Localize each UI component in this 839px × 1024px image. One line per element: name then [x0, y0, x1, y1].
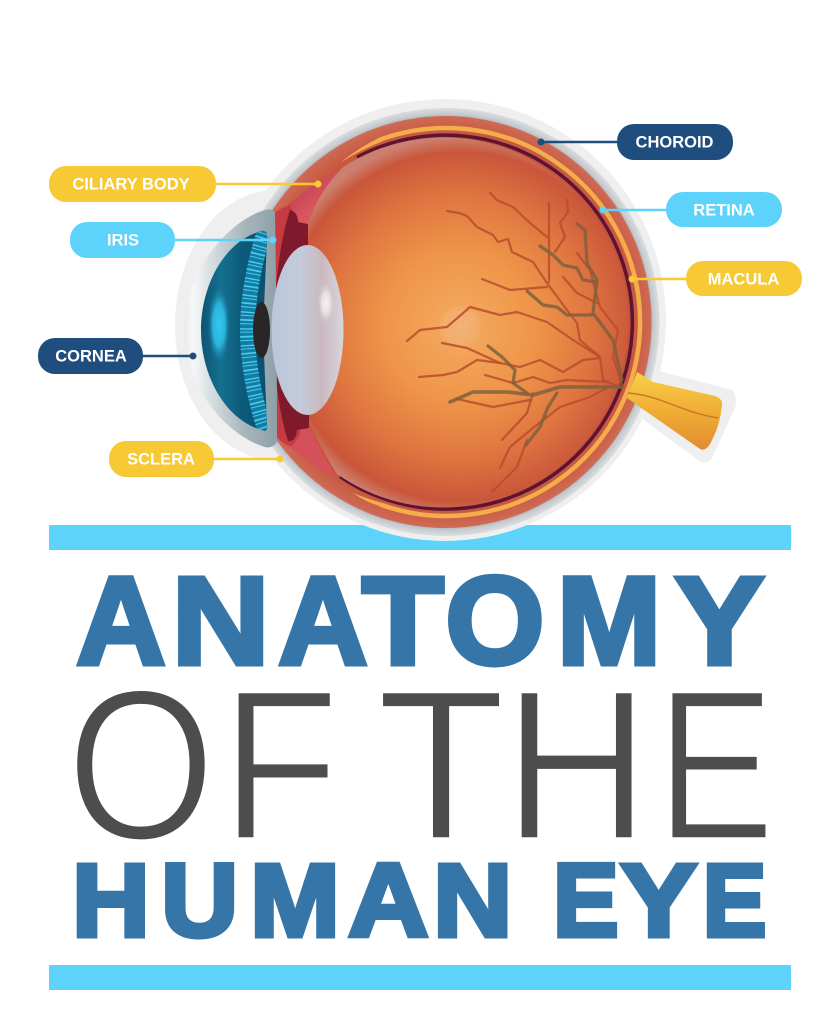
label: sclera [109, 441, 284, 477]
title line: HUMAN EYE: H [72, 844, 150, 959]
retina dark ring [340, 135, 632, 509]
label: ciliary body [49, 166, 322, 202]
bottom cyan bar [49, 965, 791, 990]
choroid red layer [240, 116, 652, 528]
title line: HUMAN EYE: Y [621, 844, 697, 959]
title line: ANATOMY: N [172, 551, 270, 691]
label: macula: MACULA [708, 270, 779, 288]
title line: HUMAN EYE [72, 842, 766, 959]
iris tissue [262, 205, 309, 446]
ciliary body muscle [280, 167, 343, 478]
eye illustration [175, 99, 736, 541]
title line: HUMAN EYE: U [161, 843, 238, 959]
title line: OF THE: E [656, 645, 774, 885]
pupil [253, 302, 270, 358]
title line: OF THE: F [221, 646, 339, 885]
label: iris [70, 222, 276, 258]
label: ciliary body: CILIARY BODY [72, 176, 190, 194]
yellow choroid ring [340, 128, 640, 516]
label: choroid [538, 124, 733, 160]
title line: ANATOMY: M [557, 552, 661, 691]
title line: HUMAN EYE: M [250, 844, 340, 959]
top cyan bar [49, 525, 791, 550]
optic nerve [627, 372, 722, 450]
label: cornea: CORNEA [55, 348, 127, 366]
title line: ANATOMY [76, 551, 764, 691]
label: macula [628, 261, 802, 296]
title line: HUMAN EYE: A [348, 842, 428, 958]
cornea [184, 209, 277, 447]
eye outer halo [175, 99, 736, 541]
title line: ANATOMY: A [76, 551, 166, 691]
title line: OF THE: T [377, 646, 506, 885]
lens [272, 245, 344, 415]
label: cornea [38, 338, 196, 374]
title line: ANATOMY: A [278, 551, 368, 691]
title line: HUMAN EYE: N [433, 843, 512, 958]
label: retina: RETINA [693, 202, 755, 220]
iris and anterior chamber [201, 230, 267, 431]
label: sclera: SCLERA [127, 451, 195, 469]
sclera outer layer [232, 108, 660, 536]
title line: OF THE [67, 645, 774, 885]
title line: HUMAN EYE: E [703, 843, 766, 959]
title line: HUMAN EYE: E [553, 844, 619, 959]
title line: OF THE: O [67, 646, 215, 885]
title line: OF THE: H [503, 646, 650, 885]
inner eye chamber [300, 138, 628, 508]
label: retina [600, 192, 782, 227]
label: iris: IRIS [107, 232, 139, 250]
title line: ANATOMY: T [362, 552, 444, 691]
label: choroid: CHOROID [636, 134, 714, 152]
blood vessels [407, 193, 622, 492]
title line: ANATOMY: Y [675, 552, 764, 691]
title line: ANATOMY: O [445, 551, 545, 691]
